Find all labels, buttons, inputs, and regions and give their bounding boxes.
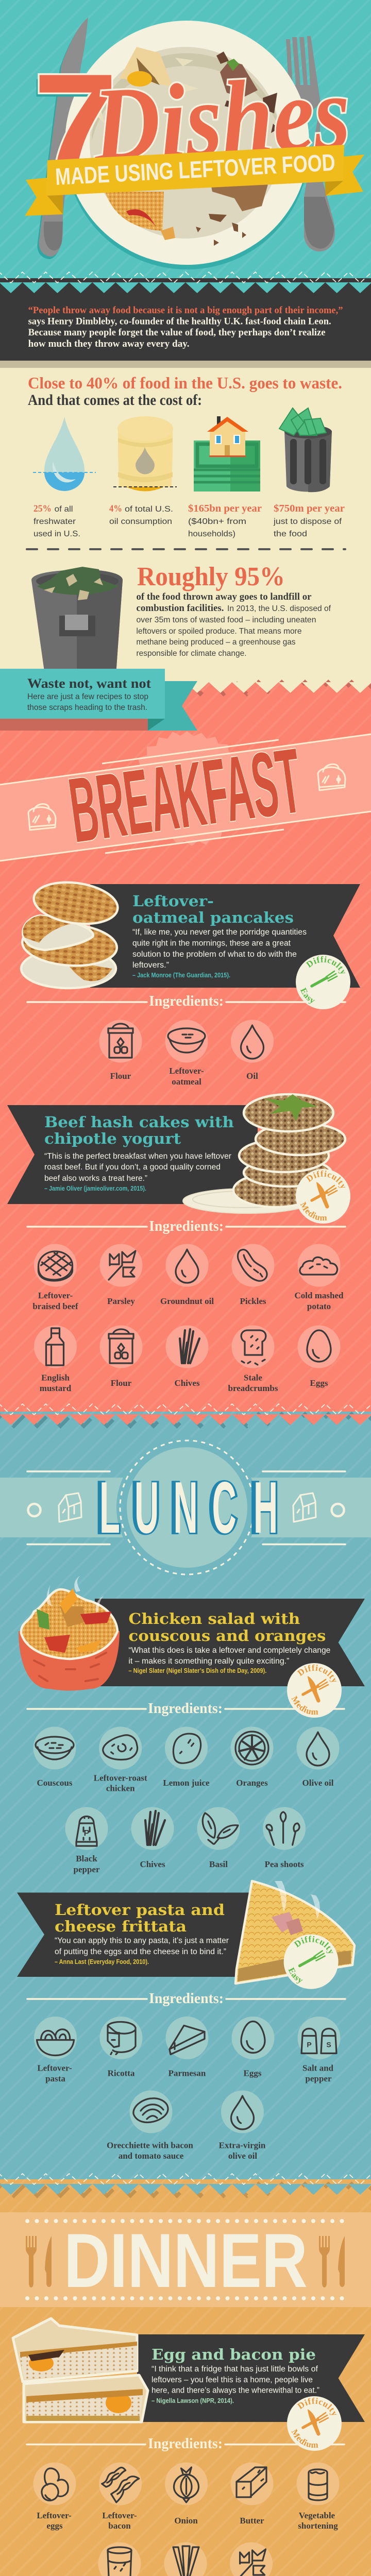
recipe title: Leftover pasta and	[55, 1901, 225, 1919]
icon: trash can with money	[279, 408, 332, 492]
ingredient: eggs	[232, 2016, 274, 2078]
badge: difficulty medium: Medium	[291, 2429, 318, 2448]
ingredient: leftover-braised beef: braised beef	[32, 1301, 78, 1311]
caption: freshwater: of all	[55, 505, 73, 514]
ingredient: eggs: Eggs	[244, 2069, 262, 2078]
recipe quote: “You can apply this to any pasta, it’s just a matter	[55, 1937, 229, 1945]
ingredient: leftover-bacon: Leftover-	[102, 2511, 137, 2520]
ingredient: leftover-roast chicken: Leftover-roast	[94, 1773, 147, 1783]
ingredient: ricotta	[100, 2016, 142, 2078]
recipe title: Beef hash cakes with	[44, 1113, 234, 1131]
ingredient: basil	[197, 1807, 240, 1869]
intro quote text	[28, 305, 343, 349]
ingredient: extra-virgin olive oil: Extra-virgin	[219, 2140, 266, 2150]
ingredient: leftover-braised beef	[32, 1244, 78, 1311]
ingredient: leftover-eggs	[33, 2463, 76, 2531]
section: food waste facts	[0, 368, 371, 687]
heading: 40 percent: Close to 40% of food in the U.S. goes to waste.	[28, 374, 342, 392]
ingredient: salt and pepper	[298, 2016, 340, 2083]
food scrap: beef	[216, 52, 278, 133]
intro quote text: “People throw away food because it is not a big enough part of their income,”	[28, 305, 343, 316]
badge: difficulty medium: Difficulty	[306, 1171, 345, 1188]
ingredient: eggs	[298, 1325, 340, 1388]
ingredient: iced water	[98, 2542, 141, 2576]
ingredient: orecchiette: and tomato sauce	[119, 2151, 184, 2161]
ingredients heading: Ingredients:	[149, 993, 224, 1009]
recipe title: Leftover-	[132, 892, 214, 910]
heading banner: breakfast	[0, 729, 371, 862]
recipe quote: here, and there’s always the wherewithal to eat.”	[151, 2386, 319, 2395]
dish photo: frittata	[235, 1881, 355, 1984]
recipe quote	[132, 928, 307, 979]
icon: house on money	[194, 416, 260, 492]
badge: difficulty medium: Medium	[291, 1696, 318, 1715]
ingredient: parmesan	[166, 2016, 208, 2078]
heading: 40 percent: And that comes at the cost of:	[28, 392, 202, 409]
recipe quote: “If, like me, you never get the porridge quantities	[132, 928, 307, 937]
text: roughly 95 percent: Roughly 95%	[137, 562, 285, 591]
ingredient: orecchiette	[107, 2091, 193, 2161]
recipe title	[55, 1901, 225, 1935]
ingredient: flour: Flour	[111, 1378, 132, 1388]
ingredient: groundnut oil: Groundnut oil	[160, 1296, 214, 1306]
ingredient: cold mashed potato	[295, 1244, 344, 1311]
ingredient: extra-virgin olive oil: olive oil	[228, 2151, 257, 2161]
caption: disposal: just to dispose of	[273, 517, 342, 526]
ingredient: parsley: Parsley	[107, 1296, 135, 1306]
ingredient: leftover-bacon: bacon	[108, 2521, 131, 2531]
caption: freshwater	[33, 503, 80, 538]
icon: fork	[286, 36, 335, 251]
ingredient: oranges	[231, 1727, 273, 1788]
caption: disposal: $750m per year	[274, 503, 345, 514]
ingredient: leftover-pasta: Leftover-	[37, 2063, 72, 2073]
ingredients heading: Ingredients:	[148, 2435, 223, 2452]
ingredient: eggs: Eggs	[310, 1378, 328, 1388]
section: dinner	[0, 2173, 371, 2576]
badge: difficulty medium: Difficulty	[297, 1664, 336, 1682]
ingredient: chives	[131, 1807, 174, 1869]
food scrap: couscous	[105, 192, 175, 240]
ingredient: oil: Oil	[246, 1071, 258, 1081]
text: roughly 95 percent: over 35m tons of wasted food – including uneaten	[136, 616, 316, 624]
icon: toaster right	[318, 764, 345, 790]
ingredient: parmesan: Parmesan	[168, 2069, 206, 2078]
recipe title: Egg and bacon pie	[151, 2346, 316, 2363]
stat captions	[33, 503, 345, 538]
ingredient: groundnut oil	[160, 1244, 214, 1306]
ingredient: butter	[231, 2463, 273, 2526]
ingredient: flour	[100, 1325, 142, 1388]
badge: difficulty medium	[287, 1663, 342, 1718]
ingredient: flour	[99, 1020, 142, 1081]
icon: plate with leftovers	[65, 21, 309, 269]
ingredient: flour: Flour	[110, 1071, 131, 1081]
recipe title: cheese frittata	[55, 1918, 187, 1935]
caption: freshwater: 25%	[33, 503, 52, 514]
ingredient: cold mashed potato: potato	[307, 1301, 331, 1311]
text: roughly 95 percent: combustion facilities.	[136, 603, 224, 614]
text: roughly 95 percent: methane being produced – a greenhouse gas	[136, 638, 296, 647]
ribbon: waste not, want not: Waste not, want not	[27, 676, 151, 691]
ingredient: vegetable shortening	[297, 2463, 339, 2531]
badge: difficulty easy: Easy	[288, 1967, 303, 1984]
ingredient: parsley	[100, 1244, 142, 1306]
recipe quote: of putting the eggs and the cheese in to bind it.”	[55, 1947, 226, 1956]
ingredient: lemon juice	[163, 1727, 210, 1788]
caption: disposal: the food	[274, 530, 307, 538]
ingredient: leftover-eggs: Leftover-	[37, 2511, 72, 2520]
ingredients heading: Ingredients:	[148, 1700, 223, 1717]
ingredient: leftover-pasta	[34, 2016, 77, 2083]
text: roughly 95 percent: In 2013, the U.S. disposed of	[227, 604, 331, 613]
caption: oil: oil consumption	[109, 517, 172, 526]
ingredient: leftover-braised beef: Leftover-	[38, 1291, 73, 1300]
section: lunch	[0, 1403, 371, 2179]
text: roughly 95 percent: leftovers or spoiled produce. That means more	[136, 627, 302, 636]
ingredient: stale breadcrumbs: Stale	[244, 1372, 262, 1383]
section: intro quote band	[0, 272, 371, 368]
recipe title: chipotle yogurt	[44, 1130, 181, 1147]
ingredient: leftover-roast chicken: chicken	[106, 1784, 135, 1793]
heading banner: lunch: LUNCH	[96, 1467, 279, 1549]
ingredient: chives: Chives	[174, 1378, 200, 1388]
dish photo: beef hash cakes	[183, 1094, 345, 1213]
ingredient: salt and pepper: pepper	[305, 2074, 332, 2083]
caption: cost: households)	[188, 530, 235, 538]
badge: difficulty easy	[296, 955, 350, 1009]
recipe quote: “I think that a fridge that has just little bowls of	[151, 2365, 318, 2374]
ingredient: cold mashed potato: Cold mashed	[295, 1291, 344, 1300]
ingredient: leftover-bacon	[99, 2463, 142, 2531]
recipe quote: – Jamie Oliver (jamieoliver.com, 2015).	[44, 1185, 146, 1192]
ingredient: oil	[231, 1020, 274, 1081]
recipe quote: quite right in the mornings, these are a great	[132, 939, 291, 948]
recipe card: beef hash cakes	[7, 1094, 345, 1213]
recipe title	[44, 1113, 234, 1147]
ingredient: leftover-oatmeal: Leftover-	[169, 1066, 204, 1076]
recipe quote: – Nigel Slater (Nigel Slater’s Dish of the Day, 2009).	[128, 1667, 266, 1674]
dish photo: couscous bowl	[19, 1575, 120, 1691]
title: 7 Dishes: 7	[30, 45, 115, 218]
icon: milk carton left	[59, 1493, 81, 1522]
ingredient: couscous: Couscous	[37, 1778, 73, 1788]
dish photo: pancakes	[21, 877, 121, 988]
ingredient: leftover-eggs: eggs	[46, 2521, 63, 2531]
caption: freshwater: used in U.S.	[33, 530, 80, 538]
ingredient: pickles	[232, 1244, 274, 1306]
recipe quote: leftovers – you feel this is a home, people live	[151, 2376, 313, 2384]
ingredient: vegetable shortening: Vegetable	[299, 2511, 335, 2520]
caption: oil	[109, 503, 173, 526]
badge: difficulty easy: Difficulty	[294, 1936, 333, 1953]
badge: difficulty medium	[296, 1169, 350, 1224]
ingredient: oranges: Oranges	[236, 1778, 268, 1788]
ingredient: chives: Chives	[140, 1859, 165, 1869]
ingredient: salt and pepper: Salt and	[302, 2063, 334, 2073]
badge: difficulty medium: Medium	[300, 1201, 327, 1221]
heading: 40 percent	[28, 374, 342, 409]
ingredient: leftover-oatmeal	[165, 1020, 208, 1087]
ingredient: english mustard: mustard	[40, 1383, 72, 1393]
ingredient: black pepper: pepper	[73, 1865, 100, 1874]
dish photo: pie	[13, 2318, 148, 2422]
ingredient: couscous	[33, 1727, 76, 1788]
caption: oil: of total U.S.	[125, 505, 173, 514]
ribbon: waste not, want not: those scraps heading to the trash.	[27, 703, 147, 712]
title: 7 Dishes: 7	[33, 41, 118, 214]
recipe quote: beef also works a treat here.”	[44, 1174, 147, 1183]
ingredient: leftover-oatmeal: oatmeal	[172, 1077, 201, 1087]
icon: fork and knife right	[319, 2236, 345, 2287]
recipe quote	[55, 1937, 229, 1965]
recipe quote: – Nigella Lawson (NPR, 2014).	[151, 2397, 234, 2404]
ingredient: parsley	[230, 2542, 273, 2576]
recipe title: Chicken salad with	[128, 1610, 300, 1628]
icon: knife	[37, 18, 88, 259]
recipe title: oatmeal pancakes	[132, 909, 294, 926]
heading banner: lunch	[0, 1437, 371, 1578]
ingredient: olive oil: Olive oil	[302, 1778, 334, 1788]
recipe quote: – Jack Monroe (The Guardian, 2015).	[132, 972, 230, 979]
ingredient: stale breadcrumbs: breadcrumbs	[228, 1383, 278, 1393]
ingredient: onion: Onion	[174, 2516, 198, 2526]
recipe quote	[128, 1646, 330, 1674]
badge: difficulty medium: Difficulty	[297, 2398, 336, 2415]
icon: garbage can	[31, 567, 123, 675]
recipe quote	[151, 2365, 319, 2404]
ingredient: vegetable shortening: shortening	[298, 2521, 338, 2531]
icon: water drop	[33, 417, 96, 491]
recipe title: couscous and oranges	[128, 1627, 326, 1645]
recipe quote: it – makes it something really quite exciting.”	[128, 1657, 289, 1666]
intro quote text: Because many people forget the value of food, they perhaps don’t realize	[28, 327, 326, 338]
ingredient: olive oil	[297, 1727, 339, 1788]
recipe quote: roast beef. But if you don’t, a good quality corned	[44, 1163, 221, 1172]
ingredient: chives	[166, 1325, 208, 1388]
heading banner: dinner: DINNER	[64, 2217, 308, 2303]
recipe quote: – Anna Last (Everyday Food, 2010).	[55, 1958, 149, 1965]
recipe quote: “What this does is take a leftover and completely change	[128, 1646, 330, 1655]
badge: difficulty medium	[287, 2396, 342, 2451]
ingredient: black pepper: Black	[76, 1854, 97, 1863]
food scrap: pie slice	[120, 47, 173, 87]
caption: oil: 4%	[109, 503, 122, 514]
text: roughly 95 percent: responsible for climate change.	[136, 649, 246, 658]
ingredient: scallion	[164, 2542, 207, 2576]
ingredient: ricotta: Ricotta	[108, 2069, 135, 2078]
icon: fork and knife left	[26, 2236, 52, 2287]
recipe card: chicken salad	[19, 1575, 365, 1691]
recipe quote	[44, 1152, 231, 1192]
ingredient: butter: Butter	[240, 2516, 264, 2526]
ingredient: pea shoots	[263, 1807, 306, 1869]
recipe title	[128, 1610, 326, 1645]
recipe card: pasta frittata	[17, 1881, 355, 1984]
icon: milk carton right	[293, 1493, 316, 1522]
heading banner: lunch: LUNCH	[99, 1467, 278, 1549]
ingredient: black pepper	[65, 1807, 108, 1874]
badge: difficulty easy	[283, 1934, 339, 1989]
ingredient: pickles: Pickles	[240, 1296, 266, 1306]
ribbon: waste not, want not	[0, 669, 197, 731]
recipe quote: leftovers.”	[132, 961, 169, 970]
icon: toaster left	[28, 804, 56, 830]
caption: cost: ($40bn+ from	[188, 517, 246, 526]
caption: freshwater: freshwater	[33, 517, 76, 526]
ingredient: orecchiette: Orecchiette with bacon	[107, 2140, 193, 2150]
ingredient: extra-virgin olive oil	[219, 2091, 266, 2161]
banner: made using leftover food	[25, 145, 364, 216]
intro quote text: how much they throw away every day.	[28, 338, 190, 349]
food scrap: nuts	[196, 184, 268, 246]
recipe title	[132, 892, 294, 926]
ingredient: onion	[165, 2463, 208, 2526]
badge: difficulty easy: Easy	[300, 987, 315, 1004]
ingredients heading: Ingredients:	[149, 1990, 224, 2007]
section: breakfast	[0, 669, 371, 1412]
ingredient: lemon juice: Lemon juice	[163, 1778, 210, 1788]
section: hero header	[0, 0, 371, 309]
ingredient: leftover-roast chicken	[94, 1727, 147, 1793]
ingredient: basil: Basil	[209, 1859, 228, 1869]
caption: disposal	[273, 503, 345, 538]
text: roughly 95 percent: of the food thrown away goes to landfill or	[136, 591, 312, 602]
ingredient: english mustard: English	[41, 1372, 70, 1383]
recipe card: egg and bacon pie	[13, 2318, 365, 2422]
ingredient: stale breadcrumbs	[228, 1325, 278, 1393]
intro quote text: says Henry Dimbleby, co-founder of the healthy U.K. fast-food chain Leon.	[28, 316, 331, 327]
caption: cost: $165bn per year	[188, 503, 262, 514]
recipe quote: solution to the problem of what to do with the	[132, 950, 297, 959]
icon: oil barrel	[113, 416, 177, 492]
ingredients heading: Ingredients:	[149, 1218, 224, 1234]
ingredient: leftover-pasta: pasta	[45, 2074, 65, 2083]
recipe card: leftover-oatmeal pancakes	[21, 877, 360, 988]
ingredient: english mustard	[34, 1325, 77, 1393]
title: 7 Dishes	[30, 41, 353, 218]
text: roughly 95 percent	[136, 562, 331, 658]
ingredient: pea shoots: Pea shoots	[265, 1859, 304, 1869]
badge: difficulty easy: Difficulty	[306, 956, 345, 974]
ribbon: waste not, want not: Here are just a few recipes to stop	[27, 692, 148, 701]
caption: cost	[188, 503, 262, 538]
recipe quote: “This is the perfect breakfast when you have leftover	[44, 1152, 231, 1161]
